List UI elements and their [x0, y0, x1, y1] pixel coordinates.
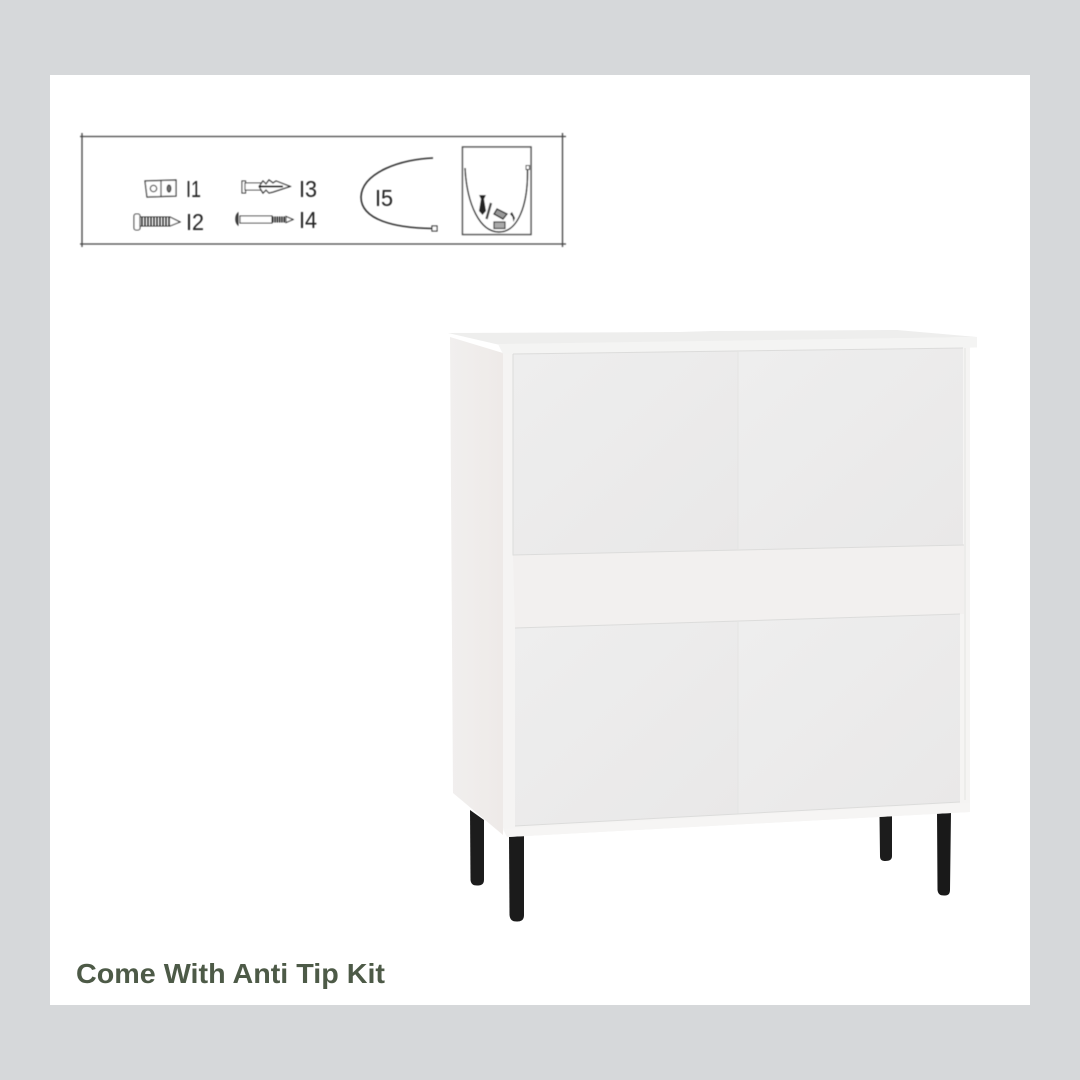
label: I2: I2	[186, 209, 204, 235]
parts box outline	[80, 133, 566, 247]
middle rail	[513, 545, 964, 628]
lower right door	[738, 614, 960, 814]
label: I5: I5	[375, 185, 393, 211]
top slab front edge	[498, 337, 977, 354]
lower left door	[515, 621, 738, 826]
icon: I3 wall anchor	[242, 180, 290, 193]
icon: I5 steel cable	[361, 158, 437, 231]
icon: packaged kit bag	[462, 147, 531, 234]
label: I3: I3	[299, 176, 317, 202]
furniture leg: back right	[880, 816, 892, 861]
upper right door	[738, 348, 963, 550]
caption: Come With Anti Tip Kit	[76, 958, 385, 989]
panel: anti tip kit parts diagram	[80, 133, 566, 247]
cabinet top surface	[448, 330, 977, 345]
furniture leg: front left	[509, 836, 524, 922]
icon: I1 bracket	[145, 180, 176, 197]
upper left door	[513, 351, 738, 555]
label: I4: I4	[299, 207, 317, 233]
icon: I2 screw	[134, 214, 180, 230]
bottom slab	[503, 803, 970, 837]
label: I1: I1	[186, 176, 201, 202]
cabinet front frame	[503, 337, 977, 837]
icon: I4 long screw	[236, 213, 293, 225]
cabinet left side panel	[450, 337, 503, 835]
door seam lines	[513, 348, 965, 826]
furniture leg: front right	[937, 812, 951, 896]
furniture leg: back left	[470, 810, 484, 886]
white content panel	[50, 75, 1030, 1005]
product: white cabinet on black legs	[448, 330, 977, 922]
